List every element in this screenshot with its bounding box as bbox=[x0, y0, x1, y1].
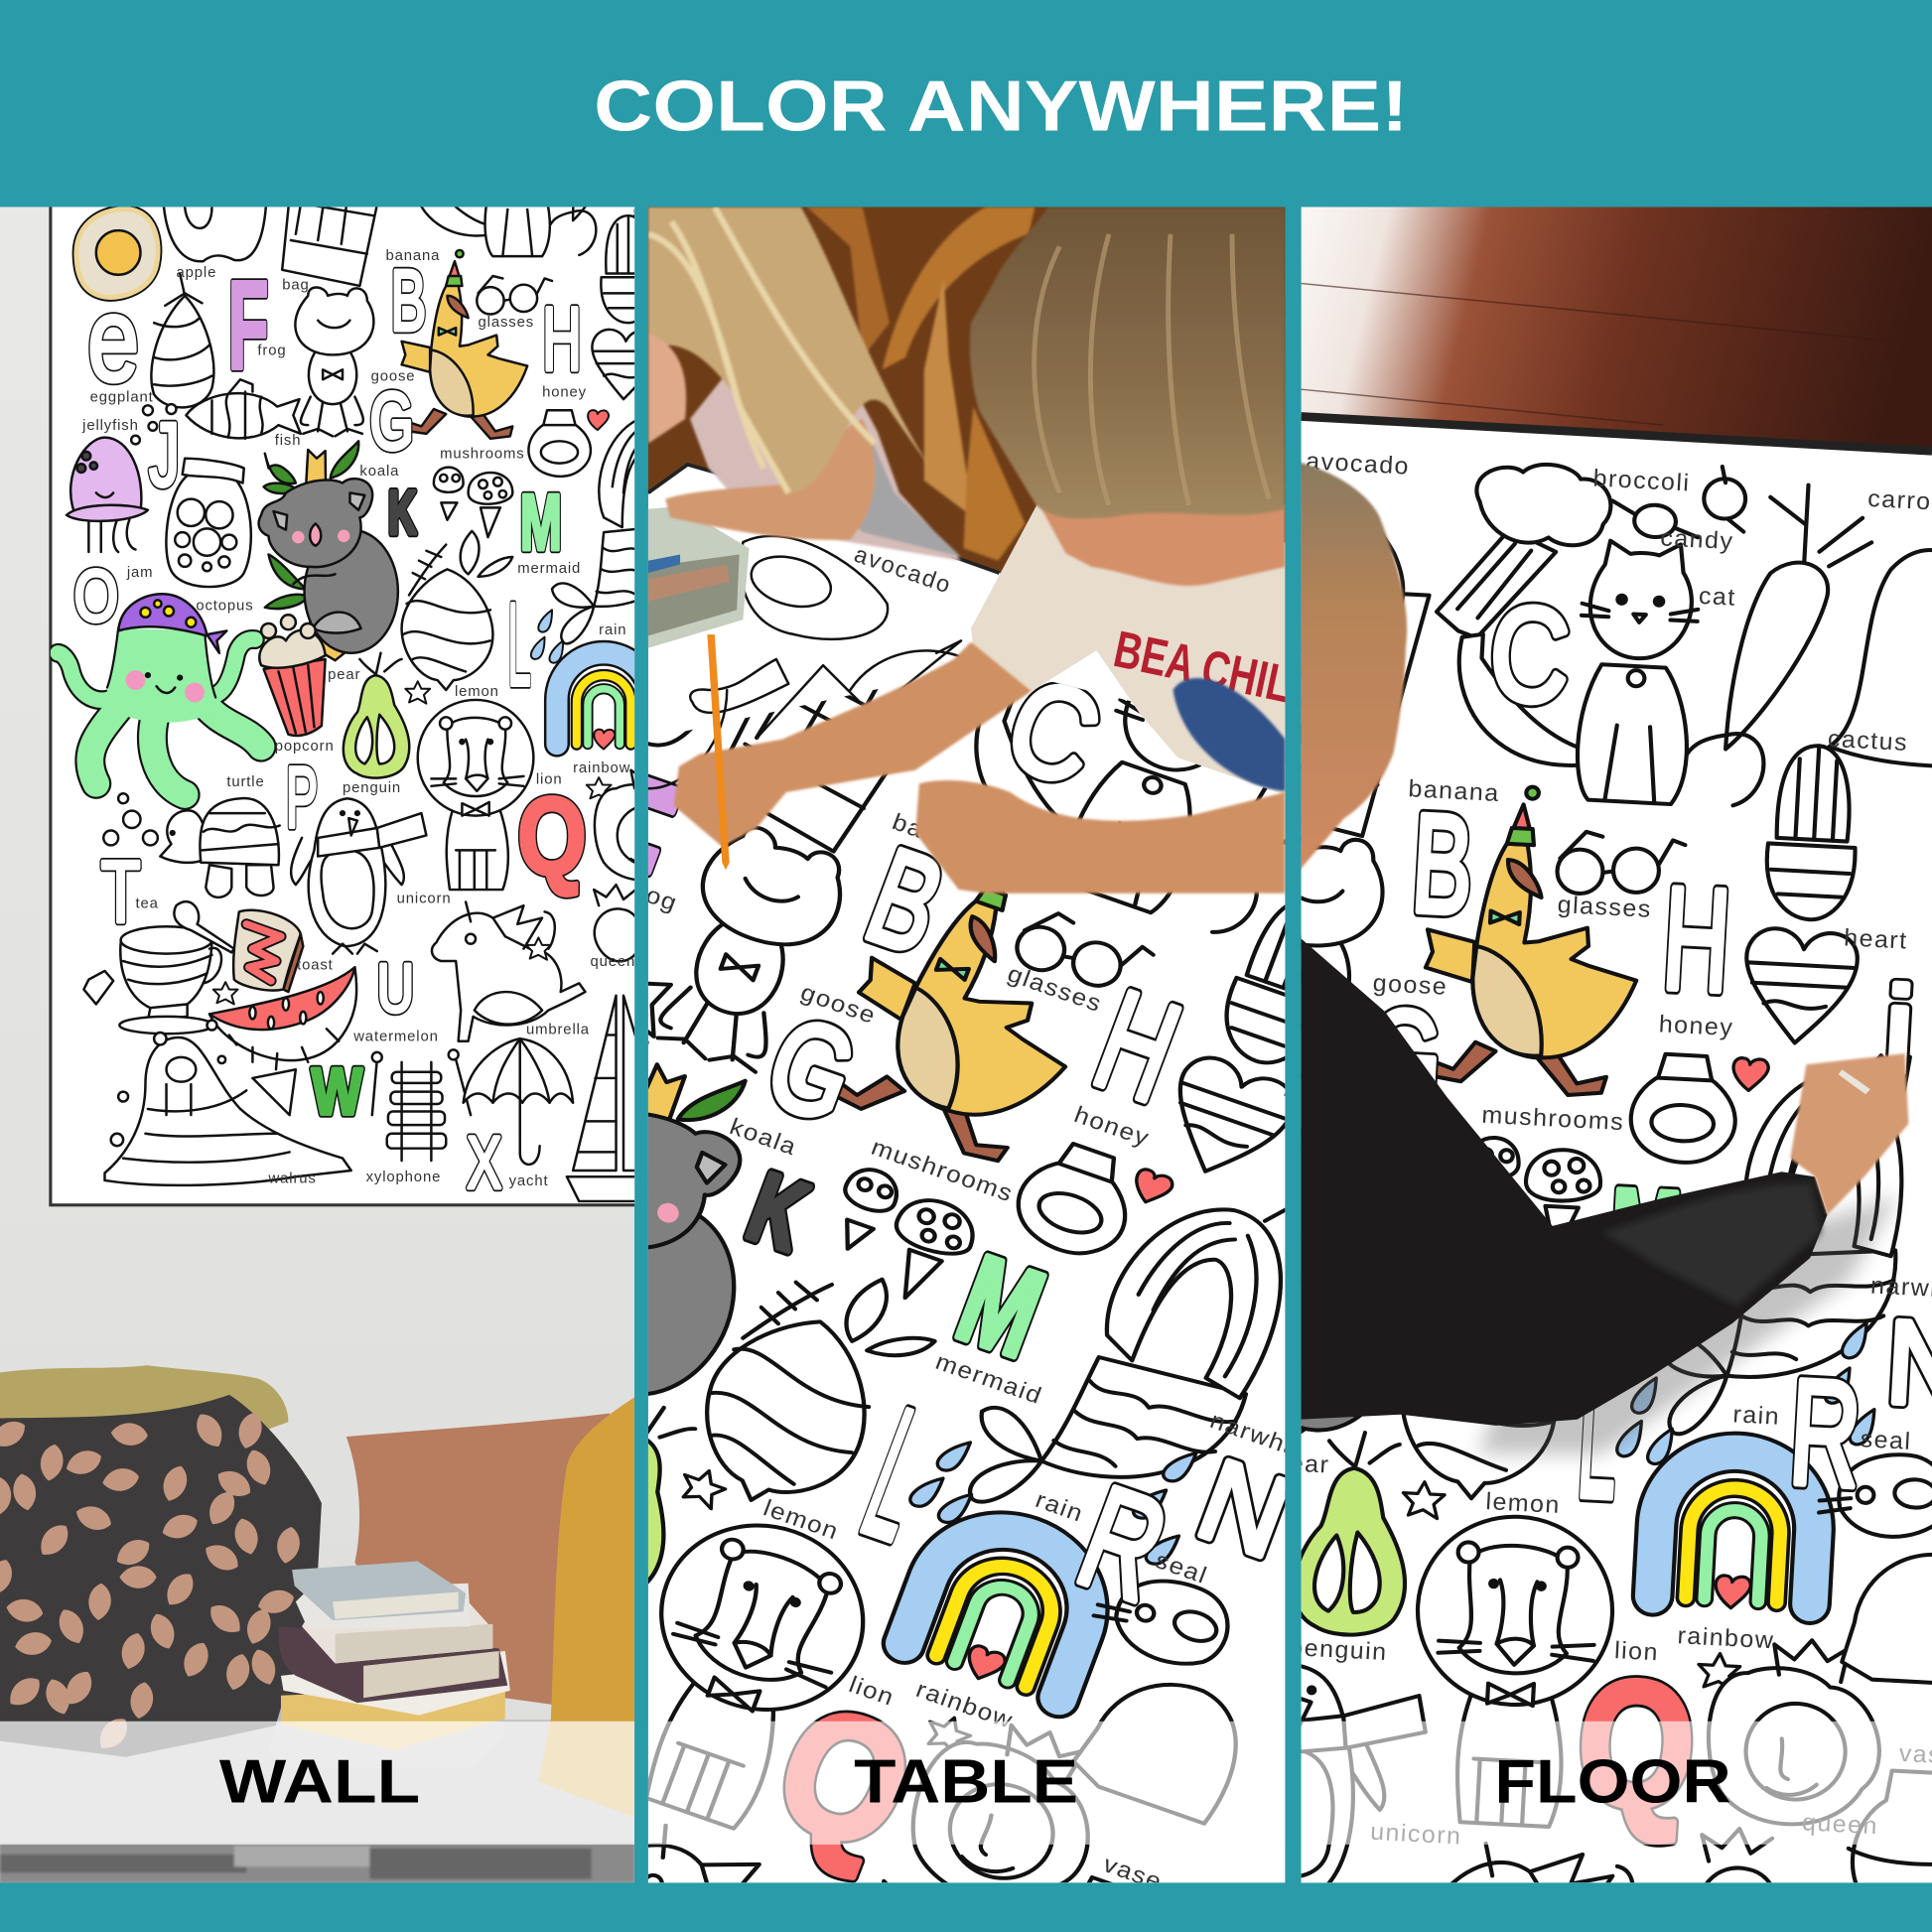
arm shadow bbox=[1478, 1195, 1897, 1453]
word labels: fish bbox=[275, 433, 301, 449]
word labels bbox=[81, 50, 744, 1189]
bubbles bbox=[103, 404, 176, 845]
panel: floor bbox=[774, 207, 1932, 1932]
word labels: popcorn bbox=[275, 739, 335, 755]
boy right arm bbox=[674, 642, 1032, 847]
boy hair bbox=[970, 207, 1285, 518]
koala bbox=[259, 441, 398, 660]
label strip: floor bbox=[1302, 1722, 1932, 1845]
word labels: frog bbox=[257, 343, 286, 358]
shirt print text: BEA CHIL bbox=[1109, 621, 1296, 714]
word labels: cactus bbox=[633, 204, 681, 219]
letters: L bbox=[507, 579, 531, 711]
floor bbox=[0, 1721, 634, 1882]
hardwood floor bbox=[1302, 207, 1932, 460]
worm and bag lines bbox=[648, 640, 967, 788]
toast bbox=[233, 910, 303, 992]
label strip: wall bbox=[0, 1722, 634, 1845]
rainbow bbox=[557, 653, 650, 745]
panel: wall bbox=[0, 207, 635, 1882]
word labels: banana bbox=[385, 248, 440, 264]
avocado bbox=[1301, 468, 1406, 650]
letters: X bbox=[467, 1121, 501, 1203]
poster sheet on floor bbox=[1302, 416, 1932, 1897]
jellyfish bbox=[67, 438, 148, 552]
letters: R bbox=[633, 587, 675, 690]
glasses bbox=[477, 276, 552, 314]
letters bbox=[73, 123, 736, 1203]
terracotta cushion bbox=[346, 1414, 610, 1707]
hand with marker bbox=[1790, 1053, 1908, 1215]
mushrooms bbox=[434, 468, 512, 537]
penguin bbox=[291, 798, 426, 954]
word labels: xylophone bbox=[366, 1170, 441, 1185]
apple bbox=[163, 160, 267, 261]
sleeve folds bbox=[1601, 1182, 1821, 1307]
xylophone bbox=[372, 1049, 471, 1161]
word labels: toast bbox=[297, 958, 334, 974]
poster sheet on wall bbox=[51, 185, 642, 1205]
bag bbox=[282, 136, 392, 286]
turtle bbox=[160, 798, 280, 897]
spoon bbox=[174, 901, 234, 952]
letters: H bbox=[542, 289, 582, 389]
olive fabric bbox=[0, 1365, 288, 1442]
patterned blanket bbox=[0, 1395, 322, 1757]
black sleeve bbox=[1299, 936, 1828, 1426]
word labels: octopus bbox=[196, 598, 254, 614]
queen head bbox=[595, 766, 697, 881]
word labels: eggplant bbox=[90, 390, 154, 406]
honey jar bbox=[528, 410, 591, 477]
boy face bbox=[1036, 492, 1285, 586]
girl bbox=[648, 207, 961, 561]
letters: J bbox=[149, 405, 180, 505]
poster top edge bbox=[1302, 416, 1932, 451]
avocado label: avocado bbox=[851, 541, 955, 599]
label: table: TABLE bbox=[854, 1748, 1078, 1817]
table poster surface bbox=[648, 465, 1285, 1897]
word labels: bag bbox=[282, 278, 310, 294]
plank lines bbox=[1302, 283, 1932, 425]
word labels: watermelon bbox=[352, 1030, 439, 1045]
stack of books bbox=[269, 1561, 510, 1769]
wooden chairs bbox=[807, 207, 1035, 561]
queen bee bbox=[594, 885, 641, 961]
broccoli bbox=[397, 52, 496, 160]
cat bbox=[483, 96, 596, 256]
fish bbox=[186, 379, 301, 439]
word labels: walrus bbox=[268, 1171, 317, 1186]
word labels: yacht bbox=[509, 1173, 548, 1189]
letters: B bbox=[390, 253, 426, 349]
word labels: turtle bbox=[226, 774, 265, 790]
word labels: penguin bbox=[343, 780, 401, 796]
word labels: lion bbox=[536, 771, 563, 787]
letters: M bbox=[520, 479, 562, 567]
letters: Q bbox=[517, 775, 587, 897]
word labels: goose bbox=[371, 368, 415, 384]
letters: T bbox=[101, 842, 140, 940]
letters: W bbox=[312, 1054, 363, 1128]
word labels: narwhal bbox=[676, 539, 735, 555]
label strip: table bbox=[648, 1722, 1285, 1845]
panel: table bbox=[0, 207, 1645, 1932]
word labels: candy bbox=[527, 85, 571, 101]
label: wall: WALL bbox=[219, 1748, 420, 1817]
poster artwork: floor bbox=[774, 422, 1932, 1932]
word labels: cat bbox=[552, 120, 574, 136]
mermaid bbox=[552, 404, 692, 643]
unicorn bbox=[432, 901, 586, 1041]
jam jar bbox=[166, 459, 251, 587]
poster artwork bbox=[50, 207, 635, 1203]
star bbox=[213, 982, 238, 1004]
word labels: mushrooms bbox=[440, 447, 525, 463]
octopus bbox=[58, 594, 261, 794]
watermelon bbox=[209, 967, 356, 1069]
carrot bbox=[573, 56, 653, 220]
star bbox=[587, 777, 612, 799]
vase bbox=[681, 844, 771, 932]
umbrella bbox=[464, 1038, 573, 1165]
rainbow heart bbox=[594, 730, 615, 750]
word labels: queen bbox=[653, 872, 698, 888]
pear bbox=[344, 653, 409, 778]
word labels: rainbow bbox=[573, 760, 630, 776]
letters: N bbox=[689, 552, 736, 633]
poster top edge bbox=[648, 465, 1000, 573]
word labels: jellyfish bbox=[81, 418, 139, 434]
man's head bbox=[1299, 462, 1407, 871]
word labels: tea bbox=[136, 897, 159, 912]
avocado on table bbox=[741, 536, 888, 639]
eggplant bbox=[151, 274, 213, 407]
word labels: queen bbox=[590, 954, 635, 970]
title: COLOR ANYWHERE! bbox=[594, 68, 1409, 147]
word labels: pear bbox=[328, 667, 360, 683]
shirt whale bbox=[1173, 678, 1285, 791]
popcorn bbox=[259, 615, 326, 736]
walrus bbox=[104, 1021, 351, 1185]
banana bbox=[412, 158, 523, 235]
leaves bbox=[409, 531, 512, 595]
letters: e bbox=[87, 271, 139, 406]
raindrops bbox=[531, 569, 683, 685]
letters: F bbox=[228, 254, 269, 395]
word labels: avocado bbox=[314, 50, 376, 66]
fried egg bbox=[76, 209, 158, 297]
pizza slice bbox=[252, 1069, 296, 1115]
tea cup bbox=[83, 926, 221, 1034]
word labels: glasses bbox=[479, 315, 534, 331]
boy shirt bbox=[971, 499, 1285, 794]
word labels: carrot bbox=[649, 55, 692, 70]
word labels: vase bbox=[709, 826, 744, 842]
dining room background bbox=[648, 207, 1285, 725]
label: floor: FLOOR bbox=[1494, 1748, 1731, 1817]
letters: U bbox=[377, 951, 414, 1027]
goose bbox=[402, 250, 527, 439]
cactus bbox=[601, 215, 653, 323]
lion bbox=[418, 700, 533, 890]
letters: K bbox=[388, 479, 417, 547]
lemon bbox=[402, 569, 492, 690]
word labels: jam bbox=[126, 565, 153, 581]
letters: P bbox=[286, 750, 318, 846]
boy left arm and hand bbox=[915, 780, 1285, 894]
word labels: lemon bbox=[455, 684, 499, 700]
mustard armchair bbox=[538, 1397, 634, 1818]
yacht bbox=[567, 996, 678, 1201]
frog bbox=[295, 287, 373, 436]
word labels: honey bbox=[542, 385, 587, 401]
red heart bbox=[588, 410, 609, 430]
word labels: unicorn bbox=[397, 892, 452, 907]
word labels: rain bbox=[599, 622, 626, 638]
letters: C bbox=[430, 123, 477, 215]
seal bbox=[653, 649, 759, 788]
word labels: broccoli bbox=[485, 51, 543, 67]
tall creature bbox=[634, 91, 740, 224]
star bbox=[405, 681, 430, 704]
letters: G bbox=[369, 376, 414, 467]
word labels: umbrella bbox=[526, 1022, 590, 1037]
poster artwork: table bbox=[0, 324, 1645, 1932]
outlined letter backing bbox=[73, 123, 736, 1203]
word labels: heart bbox=[649, 326, 687, 342]
wall background bbox=[0, 207, 634, 1734]
word labels: apple bbox=[176, 265, 216, 281]
word labels: seal bbox=[675, 633, 706, 649]
letters: O bbox=[73, 555, 118, 636]
letters: i bbox=[676, 346, 694, 431]
candies bbox=[497, 47, 577, 92]
word labels: koala bbox=[359, 464, 399, 480]
orange pencil bbox=[707, 634, 730, 870]
plastic crayon box bbox=[648, 506, 750, 648]
word labels: mermaid bbox=[517, 561, 581, 577]
striped heart bbox=[592, 330, 658, 399]
bottom rug stripes bbox=[0, 1844, 634, 1882]
